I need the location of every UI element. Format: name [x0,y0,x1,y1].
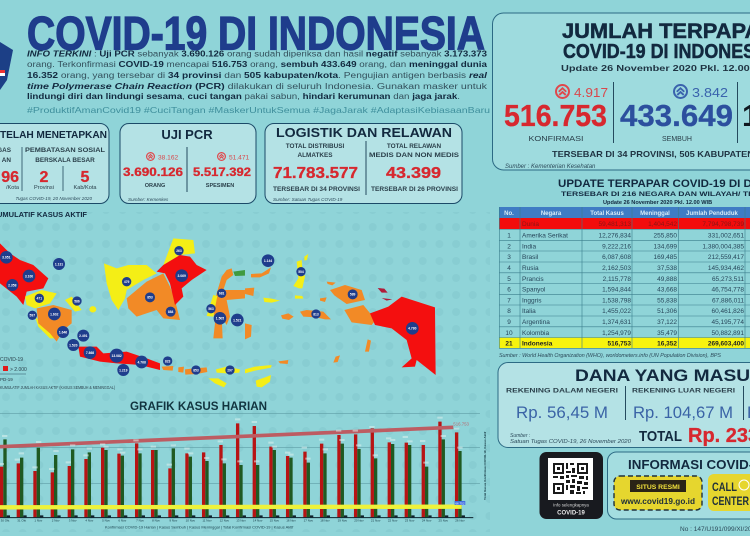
table rows: 3 [507,254,511,261]
table rows: 10 [505,330,513,337]
table rows: 1 [507,232,511,240]
province case bubbles west: 471 [37,297,42,301]
sulawesi north arm and southeast [245,267,271,339]
table header: Jumlah Penduduk [686,211,738,217]
stat: sembuh: SEMBUH [662,136,692,143]
chart legend: Konfirmasi COVID-19 Harian | Kasus Sembuh | Kasus Meninggal | Total Konfirmasi COVID-19 | Kasus Aktif [105,525,293,529]
hashtags: #ProduktifAmanCovid19 #CuciTangan #MaskerUntukSemua #JagaJarak #AdaptasiKebiasaanBaru [27,106,491,115]
official site badge [614,476,702,510]
world row: 59,481,313 [598,221,631,228]
panel: logistik dan relawan: MEDIS DAN NON MEDIS [369,152,460,159]
date axis labels: 1 Nov [34,518,43,522]
table rows: 331,002,651 [708,232,744,240]
qr code card [540,452,603,519]
panel: uji pcr [120,124,256,204]
papua barat [330,285,376,325]
raja ampat islands [378,288,392,301]
province case bubbles west: 1.131 [55,262,63,266]
province case bubbles west: 297 [227,368,233,372]
date axis labels: 25 Nov [439,518,449,522]
date axis labels: 21 Nov [371,518,381,522]
table rows: 49,888 [657,276,677,283]
cumulative confirmed line [0,427,453,447]
panel: logistik dan relawan: ALMATKES [297,152,333,159]
date axis labels: 8 Nov [152,518,160,522]
stat: sembuh: 433.649 [620,98,733,133]
source: Satuan Tugas COVID-19, 26 November 2020 [510,439,631,445]
panel: telah menetapkan: /Kota [6,185,20,191]
table rows: Inggris [522,297,542,304]
source: Sumber : Kementerian Kesehatan [505,164,596,170]
table rows: 45,195,774 [711,319,744,326]
date axis labels: 15 Nov [270,518,280,522]
kalimantan central [127,273,180,320]
table rows: 55,838 [657,297,677,304]
date axis labels: 6 Nov [118,518,127,522]
domestic account: REKENING DALAM NEGERI [506,388,618,394]
source [510,433,631,445]
table rows: 60,461,826 [711,308,744,315]
table rows: Amerika Serikat [522,232,568,240]
date axis labels: 16 Nov [286,518,296,522]
table rows: 1,594,844 [602,286,631,294]
panel: uji pcr: 3.690.126 [123,167,183,179]
deaths bars [7,515,465,517]
date axis labels: 17 Nov [304,518,314,522]
province case bubbles west: 1.219 [119,368,128,372]
map legend [0,357,116,390]
date axis labels: 14 Nov [253,518,263,522]
panel: telah menetapkan: TELAH MENETAPKAN [0,130,107,141]
date axis labels: 7 Nov [136,518,144,522]
table rows: Argentina [522,319,550,326]
table rows: Prancis [522,276,544,283]
panel: logistik dan relawan: TERSEBAR DI 26 PROVINSI [371,187,458,193]
map: western and central indonesia [0,238,245,387]
province case bubbles west: 7.868 [86,351,94,355]
recovered cases bars [3,439,462,517]
total: TOTAL [639,428,682,445]
stat: konfirmasi [504,85,608,143]
date axis labels: 18 Nov [320,518,330,522]
table rows: 35,479 [657,330,677,337]
date axis labels: 31 Okt [17,518,26,522]
date axis labels: 13 Nov [236,518,246,522]
province case bubbles west: 1.505 [216,317,224,321]
table rows: 67,886,011 [712,297,744,304]
table source: Sumber : World Health Organization (WHO), worldometers.info (UN Population Division), BPS [499,353,722,359]
chart title: GRAFIK KASUS HARIAN [130,401,267,413]
table rows [505,232,744,337]
foreign account: Rp. 104,67 M [633,403,733,422]
table header: No. [504,211,514,217]
qr code card: Info selengkapnya [553,502,589,508]
call center badge [708,474,750,511]
table header [499,207,750,218]
province case bubbles east: 1.144 [264,259,272,263]
active cases line [0,500,462,514]
province case bubbles east [262,254,419,335]
indonesia row: Indonesia [522,340,553,348]
java [78,347,160,370]
grid lines [499,207,750,348]
province case bubbles west: 884 [168,310,174,314]
sulawesi [213,268,245,338]
stat: konfirmasi: 516.753 [504,98,607,133]
info paragraph [27,50,488,101]
table rows: Italia [522,308,536,315]
sumatra yellow provinces [25,290,96,338]
province case bubbles west: 563 [208,307,214,311]
province case bubbles west: 263 [176,249,182,253]
info paragraph: INFO TERKINI : Uji PCR sebanyak 3.690.126 orang sudah diperiksa dan hasil negatif sebanyak 3.173.373 [27,50,488,58]
papua [370,297,436,375]
world table [499,207,750,348]
table rows: 169,485 [654,254,677,261]
table rows: 134,699 [654,243,677,250]
heading [562,20,750,63]
panel: telah menetapkan: PEMBATASAN SOSIAL [25,147,105,154]
panel: uji pcr: SPESIMEN [206,183,234,189]
date axis labels: 12 Nov [220,518,230,522]
indonesia row [505,340,744,348]
map legend: PD-19 [0,377,13,382]
panel: uji pcr: UJI PCR [161,127,213,142]
official site badge: www.covid19.go.id [620,497,695,506]
province case bubbles west: 4.768 [137,360,146,364]
total value label: 516.753 [453,422,470,427]
date axis labels: 2 Nov [52,518,60,522]
nusa tenggara yellow [208,367,240,387]
world row: Dunia [522,221,539,228]
table rows: 9,222,216 [602,243,631,250]
province case bubbles west: 1.602 [50,312,59,316]
table heading: TERSEBAR DI 216 NEGARA DAN WILAYAH/ TERITORI [561,191,750,198]
date axis labels: 3 Nov [69,518,77,522]
confirmed cases bars [0,422,458,517]
table rows: 9 [507,319,511,326]
world row: 7,794,798,739 [702,221,744,228]
table header: Total Kasus [590,211,624,217]
title: COVID-19 DI INDONESIA [27,6,485,60]
province case bubbles west: 681 [219,292,225,296]
panel: uji pcr: 51.471 [229,154,250,162]
province case bubbles west: 3.100 [25,274,33,278]
panel: uji pcr: Sumber: Kemenkes [128,197,169,202]
date axis labels: 9 Nov [169,518,178,522]
qr code card: COVID-19 [557,510,585,516]
y axis title: Total Kasus Konfirmasi COVID-19, Kasus Aktif [483,432,487,500]
indonesia row: 21 [505,340,513,348]
panel: uji pcr: ORANG [145,183,165,189]
stat: konfirmasi: 4.917 [574,86,608,100]
panel: logistik dan relawan: LOGISTIK DAN RELAWAN [276,125,452,140]
table header: Meninggal [640,211,670,217]
table rows: 43,668 [657,286,677,294]
table rows: Brasil [522,254,539,261]
table rows: 8 [507,308,511,315]
province case bubbles west: 479 [124,280,130,284]
panel: logistik dan relawan: Sumber: Satuan Tugas COVID-19 [273,197,343,202]
panel: informasi covid-19 [608,452,750,519]
update date: Update 26 November 2020 Pkl. 12.00 WIB [561,64,750,73]
date axis labels: 4 Nov [85,518,94,522]
foreign account: REKENING LUAR NEGERI [632,388,735,394]
table heading [558,178,750,206]
panel: telah menetapkan: Provinsi [34,185,54,191]
table rows: 6,087,608 [602,254,631,261]
daily cases chart [0,413,487,529]
table rows: 1,538,798 [602,297,631,304]
panel: telah menetapkan: Tugas COVID-19, 20 November 2020 [15,196,92,201]
date axis labels: 30 Okt [1,518,10,522]
table rows: 1,374,631 [602,319,631,326]
panel: logistik dan relawan [265,124,462,204]
indonesia row: 269,603,400 [708,340,744,348]
table rows: Kolombia [522,330,549,337]
province case bubbles west: 1.646 [59,330,67,334]
province case bubbles west: 586 [74,299,80,303]
province case bubbles west: 3.069 [177,274,186,278]
table rows: 51,306 [657,308,677,315]
table rows: 50,882,891 [711,330,744,337]
province case bubbles west: 1.520 [69,343,78,347]
table rows: 7 [507,297,511,304]
province case bubbles west: 1.521 [233,318,242,322]
table rows: 46,754,778 [711,286,744,294]
table rows: 145,934,462 [708,265,744,272]
heading: DANA YANG MASUK [575,367,750,385]
table rows: 1,254,979 [602,330,631,337]
province case bubbles west: 13.082 [112,354,122,358]
world row [499,218,750,229]
date axis labels [1,518,465,522]
indonesia row: 516,753 [608,340,631,348]
province case bubbles east: 589 [350,293,356,297]
stat: sembuh: 3.842 [692,86,728,100]
domestic account [506,388,618,422]
panel: jumlah terpapar [492,13,750,170]
value label markers [0,417,463,470]
date axis labels: 19 Nov [338,518,348,522]
indonesia row: 16,352 [657,340,677,348]
panel: logistik dan relawan: TOTAL RELAWAN [387,143,442,150]
table rows: 37,122 [657,319,677,326]
province case bubbles west [0,246,244,376]
table rows: 212,559,417 [708,254,744,261]
panel: uji pcr: 38.162 [158,154,179,162]
domestic account: Rp. 56,45 M [516,403,608,422]
foreign account [632,388,735,422]
panel: telah menetapkan: BERSKALA BESAR [35,157,95,164]
map legend: KUMULATIF JUMLAH KASUS AKTIF (KASUS SEMBUH & MENINGGAL) [0,385,116,390]
panel: telah menetapkan: Kab/Kota [73,185,97,191]
province case bubbles east: 504 [298,270,304,274]
panel: uji pcr: 5.517.392 [193,167,251,179]
last active value tag [455,501,465,505]
info paragraph: lindungi diri dan lindungi sesama , cuci tangan pakai sabun, hindari kerumunan dan jaga jarak . [27,92,460,101]
official site badge: SITUS RESMI [636,484,680,491]
province case bubbles west: 3.051 [2,256,11,260]
panel: telah menetapkan: 96 [1,169,19,186]
panel: logistik dan relawan: 71.783.577 [273,165,358,182]
table header: Negara [541,211,562,217]
map legend: COVID-19 [0,357,23,363]
table rows: 12,276,834 [598,232,631,240]
stat: konfirmasi: KONFIRMASI [528,136,584,143]
indonesia row highlight [499,338,750,348]
world row: 1,404,542 [648,221,677,228]
date axis labels: 23 Nov [405,518,415,522]
table rows: 5 [507,276,511,283]
table rows: 37,538 [657,265,677,272]
nusa tenggara orange [162,366,207,375]
info paragraph: 16.352 orang, yang tersebar di 34 provinsi dan 505 kabupaten/kota . Pengujian antigen berbasis real [27,71,488,80]
table rows: 2 [507,243,511,250]
table rows: India [522,243,536,250]
province case bubbles west: 853 [193,368,199,372]
date axis labels: 20 Nov [354,518,364,522]
sumatra south [37,305,72,342]
table rows: 255,850 [654,232,677,240]
table rows: 4 [507,265,511,272]
table rows: 2,162,503 [602,265,631,272]
table rows: 1,455,022 [602,308,631,315]
province case bubbles west: 823 [165,359,171,363]
maluku utara and small yellow islands [245,254,308,387]
date axis labels: 10 Nov [186,518,196,522]
panel: logistik dan relawan: TOTAL DISTRIBUSI [286,143,345,150]
date axis labels: 5 Nov [102,518,110,522]
axis baseline [0,516,473,519]
table rows: 2,115,778 [603,276,631,283]
date axis labels: 26 Nov [455,518,465,522]
qr code [553,463,588,494]
date axis labels: 11 Nov [202,518,212,522]
table rows: 6 [507,286,511,294]
stat: sembuh [620,85,733,143]
province case bubbles west: 597 [30,314,35,318]
table heading: Update 26 November 2020 Pkl. 12.00 WIB [603,200,712,206]
panel: telah menetapkan: AN [2,157,11,164]
call center badge: CALL [712,480,737,494]
info paragraph: time Polymerase Chain Reaction (PCR) dilakukan di seluruh Indonesia. Gunakan masker untuk [27,82,488,91]
panel: telah menetapkan [0,124,109,204]
kalimantan west [104,263,157,310]
table rows: 1,380,004,385 [702,243,744,250]
panel: telah menetapkan: 5 [81,169,90,186]
kalimantan north [163,238,195,265]
province case bubbles west: 2.358 [8,283,17,287]
map legend: > 2.000 [10,367,27,373]
province case bubbles east: 4.780 [408,327,417,331]
table rows: 65,273,511 [712,276,744,283]
daily cases chart: 66.752 [455,501,465,505]
province case bubbles west: 2.491 [79,334,88,338]
kalimantan east [157,255,207,305]
date axis labels: 24 Nov [422,518,432,522]
province case bubbles west: 853 [147,296,153,300]
panel: logistik dan relawan: TERSEBAR DI 34 PROVINSI [273,187,360,193]
maluku orange [278,282,371,364]
province case bubbles east: 813 [313,312,319,316]
panel: dana yang masuk [498,362,750,448]
panel: logistik dan relawan: 43.399 [386,165,441,182]
table rows: Rusia [522,265,539,272]
info paragraph: orang. Terkonfirmasi COVID-19 mencapai 516.753 orang, sembuh 433.649 orang, dan meninggal dunia [27,60,488,69]
logo [0,42,13,90]
map: eastern indonesia [245,254,436,387]
table rows: Spanyol [522,286,546,294]
date axis labels: 22 Nov [388,518,398,522]
sumatra north [0,243,48,305]
panel: telah menetapkan: 2 [40,169,49,186]
source: Sumber : [510,433,531,439]
